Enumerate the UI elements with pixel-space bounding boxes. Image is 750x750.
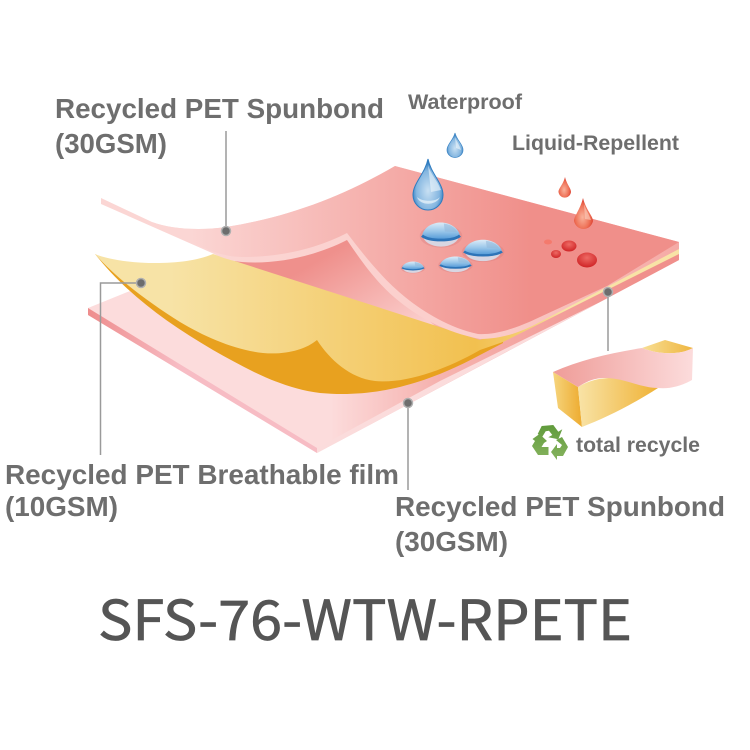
- label: waterproof: Waterproof: [408, 91, 523, 114]
- label: film weight: (10GSM): [5, 491, 118, 522]
- top spunbond layer: [101, 166, 679, 339]
- illustration: layered fabric sample: [553, 340, 693, 427]
- label: top spunbond weight: (30GSM): [55, 128, 167, 159]
- label: bottom spunbond weight: (30GSM): [395, 526, 508, 557]
- label: breathable film: Recycled PET Breathable film: [5, 459, 399, 490]
- flap underside of top layer: [230, 236, 485, 344]
- yellow breathable film layer: [95, 247, 679, 394]
- bottom spunbond layer: [88, 250, 679, 453]
- icon: red liquid drops: [544, 177, 597, 268]
- label: top spunbond: Recycled PET Spunbond: [55, 93, 384, 124]
- label: liquid-repellent: Liquid-Repellent: [512, 132, 679, 155]
- label: total recycle: total recycle: [576, 434, 700, 457]
- icon: water drops: [401, 133, 504, 273]
- title: SFS-76-WTW-RPETE: [98, 576, 632, 656]
- label: bottom spunbond: Recycled PET Spunbond: [395, 491, 725, 522]
- leader lines and dots: [100, 131, 612, 490]
- icon: recycle symbol: [532, 425, 568, 460]
